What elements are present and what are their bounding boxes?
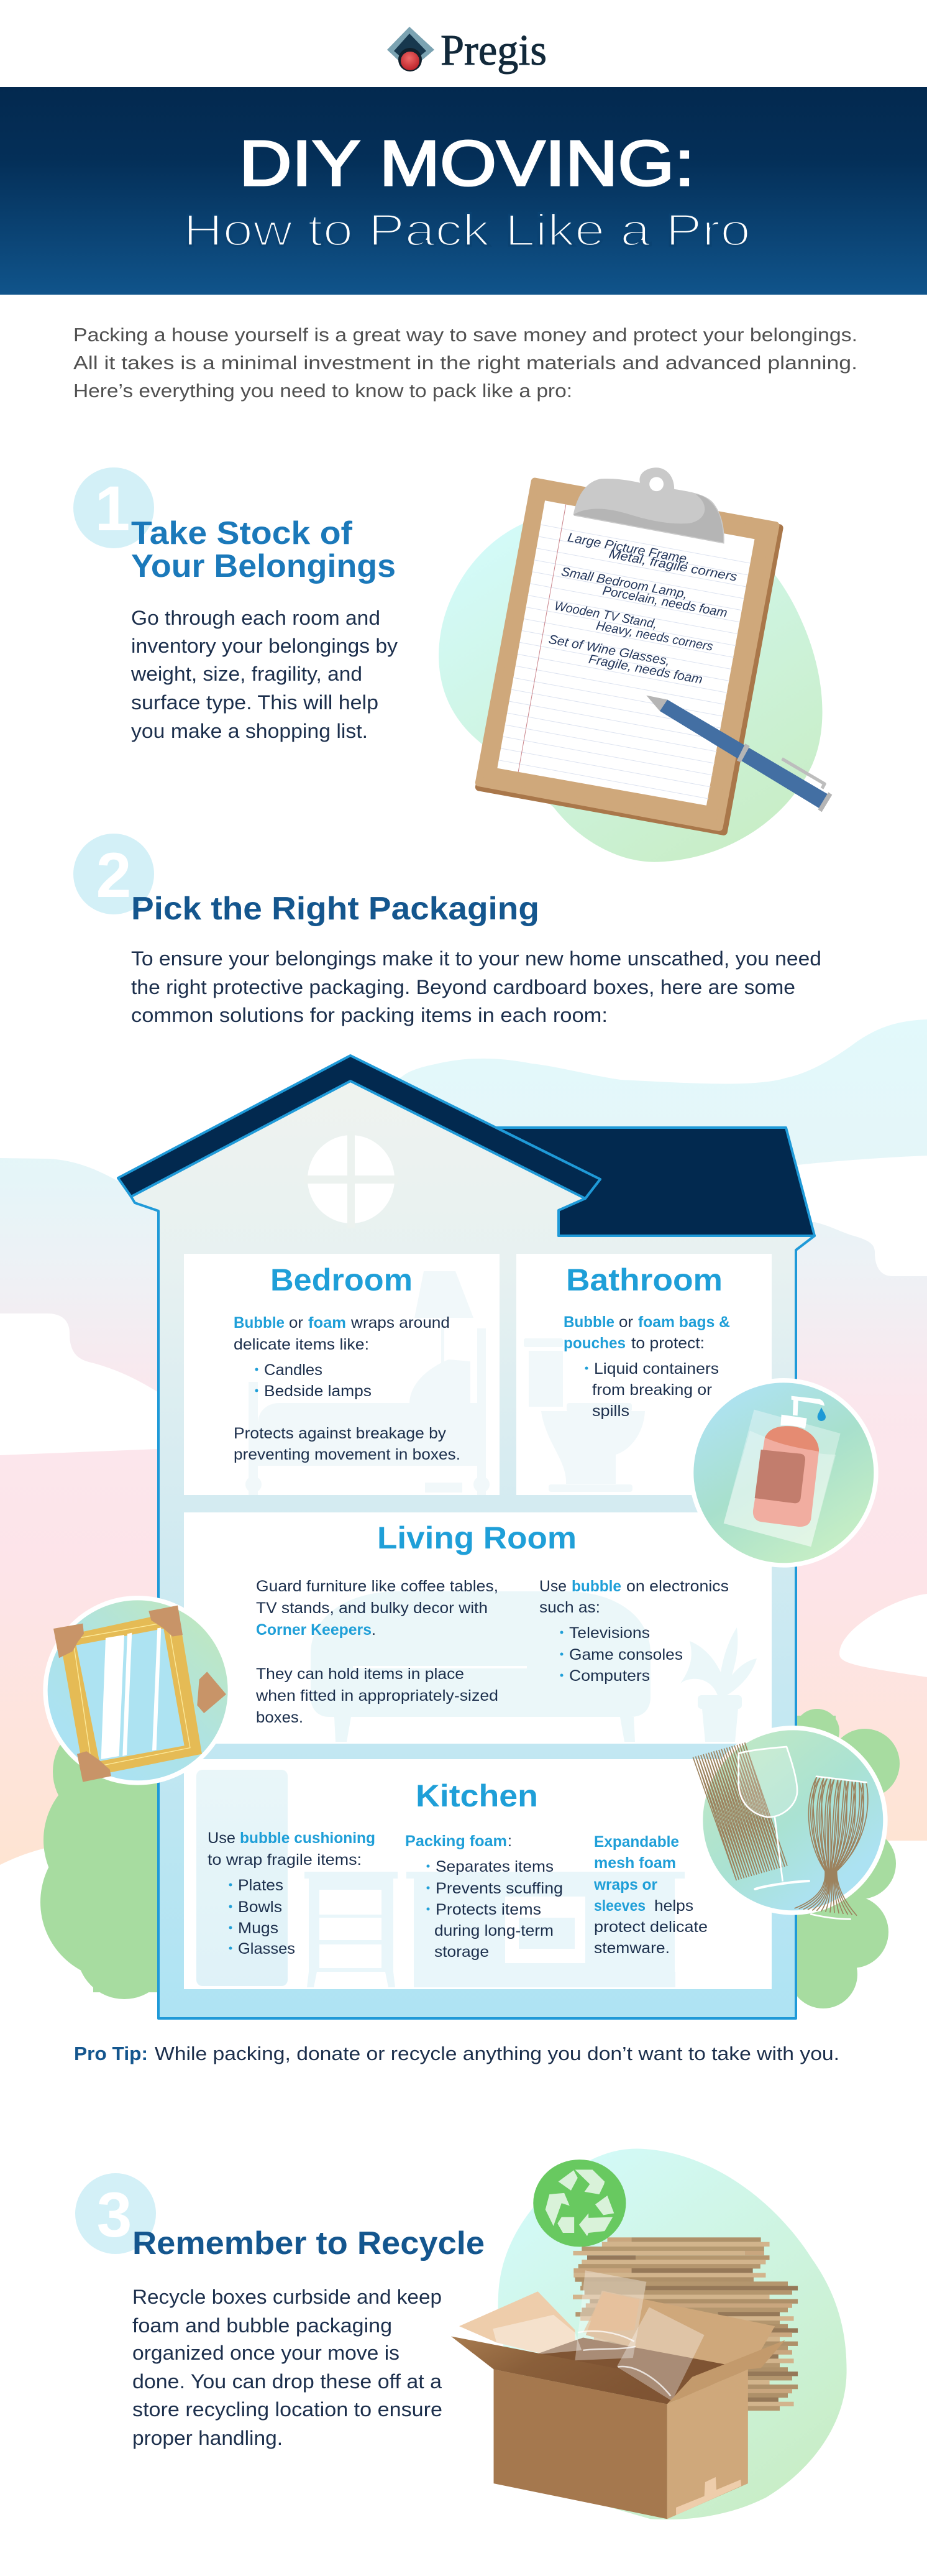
handwritten inventory list: Wooden TV Stand, xyxy=(553,599,658,632)
bedroom text: Bedside lamps xyxy=(264,1382,372,1400)
kitchen column 3: sleeves xyxy=(594,1897,646,1915)
step 3 body text: foam and bubble packaging xyxy=(132,2314,392,2337)
kitchen column 2: Packing foam xyxy=(405,1833,507,1850)
bedroom text: Bubble xyxy=(234,1314,285,1332)
living room right text: on electronics xyxy=(626,1578,729,1595)
bathroom text: Bubble xyxy=(564,1313,614,1331)
panel: living room xyxy=(184,1512,772,1744)
handwritten inventory list: Small Bedroom Lamp, xyxy=(560,565,688,602)
step 1 body text: inventory your belongings by xyxy=(131,635,398,657)
mesh foam sheet xyxy=(693,1742,787,1880)
kitchen furniture silhouette xyxy=(196,1770,685,1987)
house xyxy=(118,1056,815,2018)
icon: pen xyxy=(646,696,832,812)
kitchen column 3: mesh foam xyxy=(594,1854,676,1872)
handwritten inventory list: Porcelain, needs foam xyxy=(601,584,728,620)
kitchen column 1: Plates xyxy=(238,1877,283,1894)
bedroom text: delicate items like: xyxy=(234,1336,369,1353)
open cardboard box xyxy=(451,2270,785,2519)
step 3 body text: proper handling. xyxy=(132,2427,283,2449)
living room left text: . xyxy=(372,1621,376,1639)
mesh-wrapped wine glass xyxy=(795,1777,868,1916)
logo wordmark: Pregis xyxy=(441,27,547,75)
bubble wrap and bags xyxy=(493,2270,705,2401)
pro tip: While packing, donate or recycle anything you don’t want to take with you. xyxy=(155,2043,839,2064)
living room left text: when fitted in appropriately-sized xyxy=(255,1687,498,1704)
living room left text: They can hold items in place xyxy=(256,1665,464,1683)
kitchen column 2: Prevents scuffing xyxy=(436,1880,563,1897)
kitchen column 2: during long-term xyxy=(434,1922,554,1939)
bedroom text xyxy=(234,1314,460,1463)
box and recycling illustration xyxy=(451,2149,847,2519)
number badge 3: 3 xyxy=(97,2179,132,2250)
handwritten inventory list: Set of Wine Glasses, xyxy=(547,633,671,668)
bedroom text: wraps around xyxy=(350,1314,450,1332)
living room right text: Game consoles xyxy=(569,1646,683,1663)
house body xyxy=(131,1081,815,2018)
icon: recycling symbol xyxy=(533,2160,626,2247)
bathroom text: to protect: xyxy=(631,1335,705,1352)
kitchen column 3: helps xyxy=(654,1897,693,1915)
handwritten inventory list: Large Picture Frame, xyxy=(567,531,692,567)
bathroom text: spills xyxy=(592,1402,629,1420)
step 2 body text: the right protective packaging. Beyond cardboard boxes, here are some xyxy=(131,976,795,998)
step 1 heading xyxy=(131,515,396,584)
kitchen column 2: : xyxy=(508,1833,512,1850)
step 1 panel xyxy=(73,467,832,862)
handwritten inventory list xyxy=(547,531,738,687)
step 3 body text: store recycling location to ensure xyxy=(132,2398,442,2421)
pro tip: Pro Tip: xyxy=(74,2043,148,2064)
bathroom title: Bathroom xyxy=(566,1263,723,1297)
kitchen column 2: Separates items xyxy=(436,1858,554,1875)
number badge 1 xyxy=(73,467,154,548)
kitchen column 1: Mugs xyxy=(238,1920,278,1937)
number badge 3 xyxy=(75,2173,156,2254)
clear wine glass xyxy=(739,1747,809,1889)
step 3 body text xyxy=(132,2286,442,2449)
handwritten inventory list: Metal, fragile corners xyxy=(608,547,738,584)
kitchen column 1: Use xyxy=(208,1829,235,1847)
bedroom text: foam xyxy=(308,1314,346,1332)
number badge 1: 1 xyxy=(95,473,130,544)
living room title: Living Room xyxy=(377,1520,577,1555)
bathroom text xyxy=(564,1313,730,1420)
kitchen column 1 xyxy=(208,1829,375,1957)
number badge 2: 2 xyxy=(96,840,131,911)
bedroom text: preventing movement in boxes. xyxy=(234,1446,460,1463)
step 2 heading: Pick the Right Packaging xyxy=(131,891,539,927)
kitchen title: Kitchen xyxy=(416,1778,538,1813)
kitchen column 2 xyxy=(405,1833,563,1961)
living room left text xyxy=(255,1578,498,1726)
header banner xyxy=(0,87,927,295)
bathroom text: or xyxy=(619,1313,633,1331)
attic window xyxy=(304,1131,398,1228)
icon: picture frame with corner keepers circle xyxy=(43,1596,232,1785)
packing tape xyxy=(676,2477,741,2515)
bathroom text: from breaking or xyxy=(592,1381,712,1399)
bushes xyxy=(40,1709,900,2008)
step 3 body text: organized once your move is xyxy=(132,2342,400,2364)
intro paragraph: All it takes is a minimal investment in the right materials and advanced planning. xyxy=(73,352,857,374)
kitchen column 3: protect delicate xyxy=(594,1918,708,1936)
kitchen column 3: stemware. xyxy=(594,1939,670,1957)
panel: kitchen xyxy=(184,1759,772,1989)
step 3 panel xyxy=(75,2149,847,2519)
step 2 body text xyxy=(131,947,821,1026)
step 1 body text: weight, size, fragility, and xyxy=(130,663,362,685)
intro paragraph: Here’s everything you need to know to pack like a pro: xyxy=(73,380,572,402)
intro paragraph: Packing a house yourself is a great way to save money and protect your belongings. xyxy=(73,324,857,346)
kitchen column 2: storage xyxy=(434,1943,489,1961)
kitchen column 3 xyxy=(593,1833,708,1957)
icon: bottle in bag circle xyxy=(689,1378,879,1568)
kitchen column 3: wraps or xyxy=(593,1876,657,1893)
kitchen column 2: Protects items xyxy=(436,1901,541,1918)
bedroom furniture silhouette xyxy=(245,1271,490,1495)
bedroom text: or xyxy=(289,1314,303,1332)
subtitle: How to Pack Like a Pro xyxy=(183,206,751,255)
icon: Pregis diamond xyxy=(387,27,434,71)
step 1 heading: Your Belongings xyxy=(131,548,396,584)
kitchen column 1: Bowls xyxy=(238,1898,282,1916)
living room left text: Corner Keepers xyxy=(256,1621,372,1639)
bathroom text: Liquid containers xyxy=(594,1360,719,1378)
background sky and clouds xyxy=(0,1019,927,1872)
step 1 body text: you make a shopping list. xyxy=(131,720,368,742)
step 2 body text: common solutions for packing items in each room: xyxy=(131,1004,608,1026)
icon: wine glasses with mesh foam circle xyxy=(693,1726,888,1919)
handwritten inventory list: Heavy, needs corners xyxy=(595,619,714,654)
kitchen column 1: to wrap fragile items: xyxy=(208,1851,362,1869)
step 1 body text: Go through each room and xyxy=(131,607,380,629)
kitchen column 1: Glasses xyxy=(238,1940,295,1957)
step 2 panel xyxy=(73,834,821,1026)
living room right text: Televisions xyxy=(569,1624,650,1642)
number badge 2 xyxy=(73,834,154,914)
step 3 body text: Recycle boxes curbside and keep xyxy=(132,2286,442,2308)
panel: bathroom xyxy=(516,1254,772,1495)
living room right text: Computers xyxy=(569,1667,650,1685)
title: DIY MOVING: xyxy=(239,127,695,199)
living room right text: bubble xyxy=(572,1578,621,1595)
logo: Pregis xyxy=(387,27,547,75)
bathroom text: pouches xyxy=(564,1335,626,1352)
handwritten inventory list: Fragile, needs foam xyxy=(588,653,704,687)
living room right text xyxy=(539,1578,729,1685)
panel: bedroom xyxy=(184,1254,500,1495)
kitchen column 1: bubble cushioning xyxy=(240,1829,375,1847)
step 1 heading: Take Stock of xyxy=(131,515,353,551)
sofa and plant silhouette xyxy=(311,1591,757,1742)
living room left text: boxes. xyxy=(256,1709,303,1726)
bedroom text: Protects against breakage by xyxy=(234,1425,447,1442)
gable roof xyxy=(118,1056,600,1198)
intro paragraph xyxy=(73,324,857,402)
step 3 heading: Remember to Recycle xyxy=(132,2225,485,2261)
toilet silhouette xyxy=(524,1338,645,1492)
bedroom title: Bedroom xyxy=(270,1263,413,1297)
step 1 body text xyxy=(130,607,398,742)
clipboard illustration xyxy=(439,467,832,862)
step 3 body text: done. You can drop these off at a xyxy=(132,2370,442,2393)
living room right text: Use xyxy=(539,1578,567,1595)
bathroom text: foam bags & xyxy=(638,1313,730,1331)
living room right text: such as: xyxy=(539,1599,600,1616)
bedroom text: Candles xyxy=(264,1361,322,1379)
step 1 body text: surface type. This will help xyxy=(131,691,378,714)
right roof xyxy=(496,1128,815,1236)
living room left text: TV stands, and bulky decor with xyxy=(256,1599,488,1617)
cardboard stack xyxy=(573,2237,798,2411)
living room left text: Guard furniture like coffee tables, xyxy=(256,1578,498,1595)
kitchen column 3: Expandable xyxy=(594,1833,679,1851)
step 2 body text: To ensure your belongings make it to your new home unscathed, you need xyxy=(131,947,821,970)
